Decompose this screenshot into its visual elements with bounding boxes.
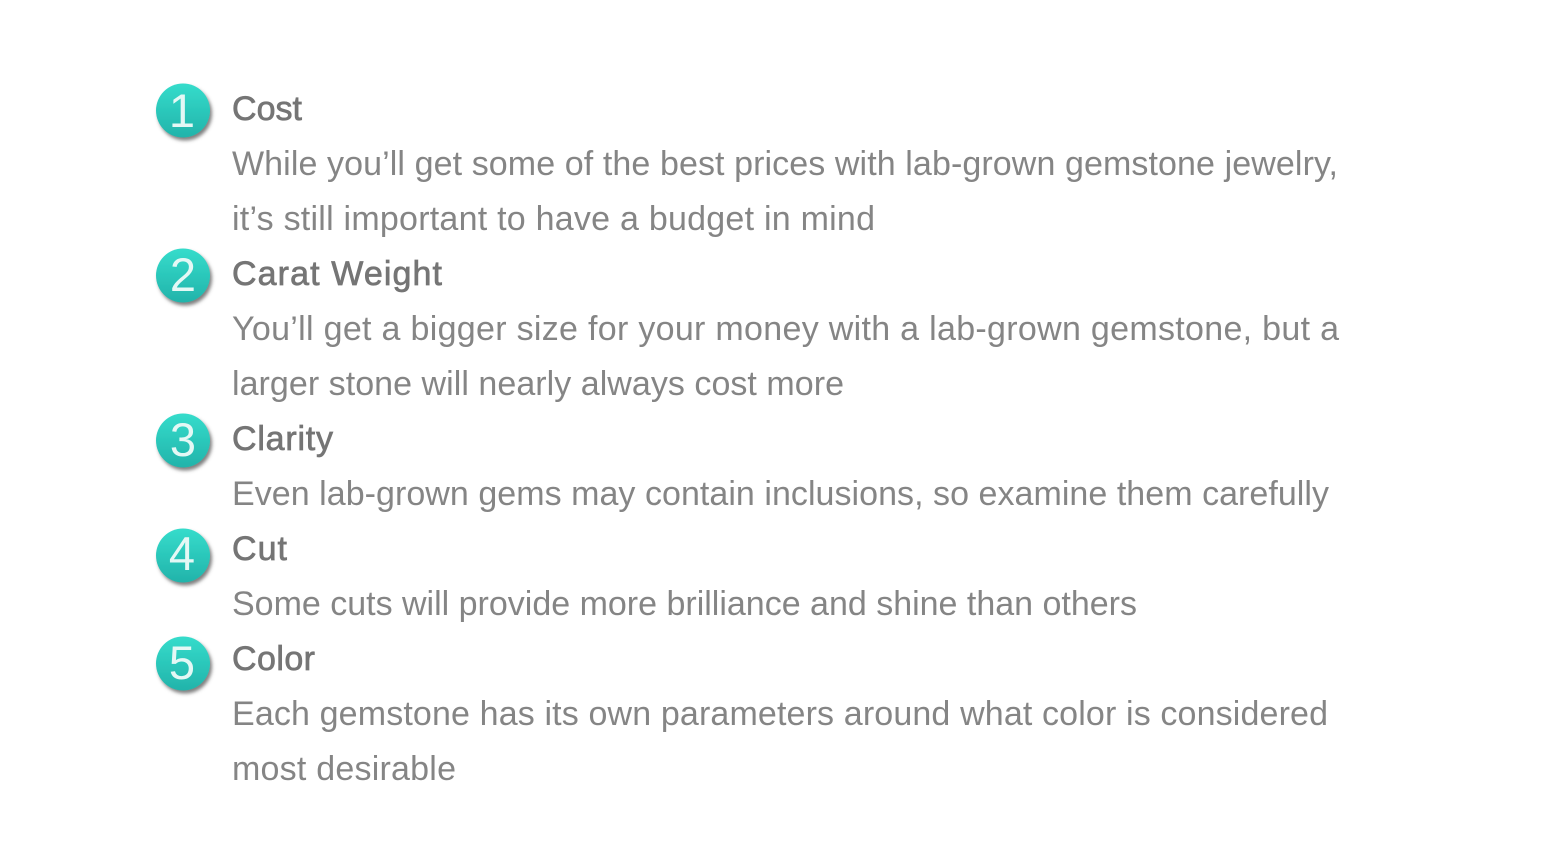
text: color description (232, 695, 1328, 788)
item 3: clarity (156, 413, 1329, 513)
item 1: cost (156, 84, 1338, 238)
icon: number 4 badge: 4 (169, 527, 195, 580)
text: color description: Each gemstone has its own parameters around what color is considered (232, 695, 1328, 733)
icon: number 2 badge: 2 (170, 248, 196, 301)
icon: number 1 badge (156, 84, 210, 138)
text: carat weight description: You’ll get a bigger size for your money with a lab-grown gemstone, but a (232, 310, 1339, 348)
heading: cost: Cost (232, 90, 303, 128)
text: cost description (232, 145, 1338, 238)
text: carat weight description (232, 310, 1339, 403)
icon: number 3 badge: 3 (170, 413, 196, 466)
item 4: cut (156, 527, 1137, 623)
heading: cut: Cut (232, 530, 288, 568)
icon: number 4 badge (156, 527, 210, 582)
item 5: color (156, 636, 1328, 788)
text: cut description: Some cuts will provide more brilliance and shine than others (232, 585, 1137, 623)
icon: number 1 badge: 1 (169, 84, 195, 137)
icon: number 5 badge (156, 636, 210, 690)
icon: number 2 badge (156, 248, 210, 302)
text: color description: most desirable (232, 750, 456, 788)
text: cost description: While you’ll get some of the best prices with lab-grown gemstone jewelry, (232, 145, 1338, 183)
heading: carat weight: Carat Weight (232, 255, 443, 293)
text: carat weight description: larger stone will nearly always cost more (232, 365, 844, 403)
text: clarity description: Even lab-grown gems may contain inclusions, so examine them carefully (232, 475, 1329, 513)
icon: number 3 badge (156, 413, 210, 468)
text: cost description: it’s still important to have a budget in mind (232, 200, 875, 238)
heading: clarity: Clarity (232, 420, 333, 458)
heading: color: Color (232, 640, 315, 678)
item 2: carat weight (156, 248, 1339, 403)
icon: number 5 badge: 5 (169, 636, 195, 689)
